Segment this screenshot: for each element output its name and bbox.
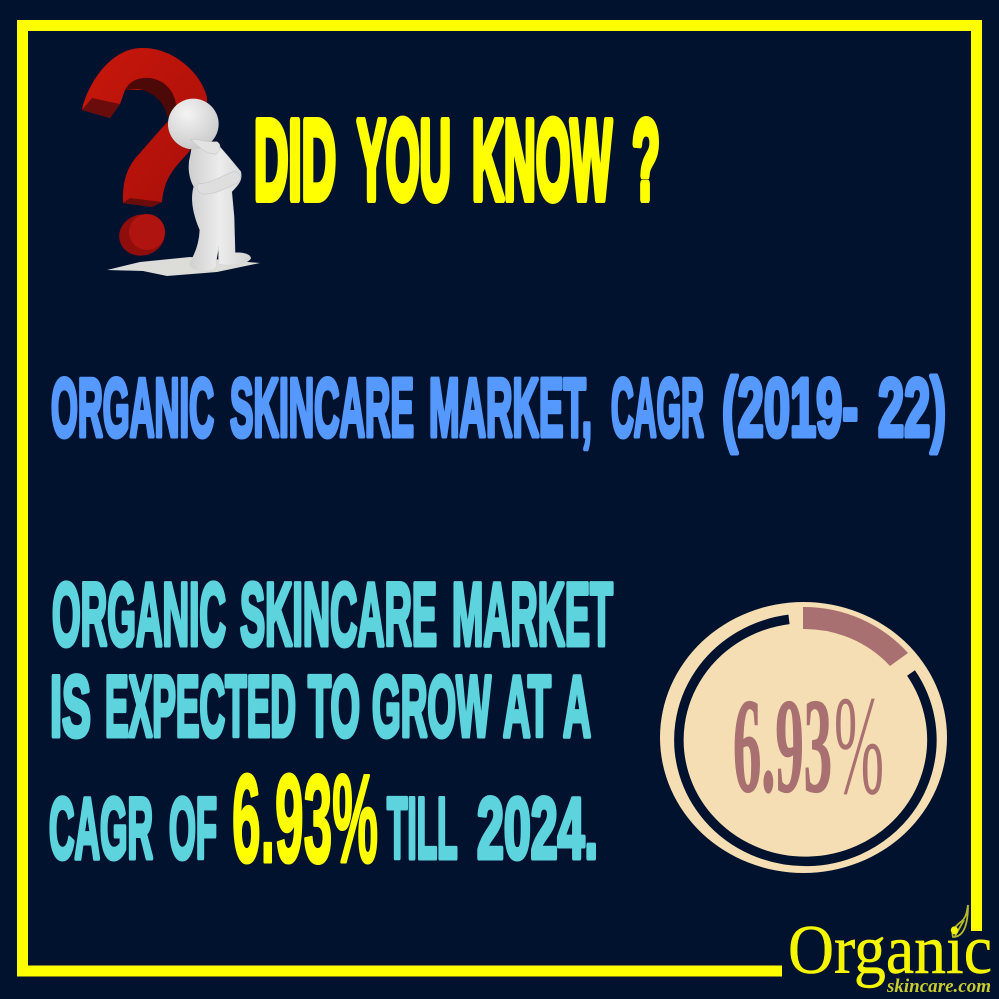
icon: floor shadow	[107, 257, 260, 276]
subheading: market CAGR: (2019-	[722, 361, 858, 454]
text block: growth statement: AT	[503, 659, 551, 755]
subheading: market CAGR: CAGR	[611, 361, 704, 454]
chart segment: 6.93%	[803, 607, 908, 666]
text block: growth statement: A	[563, 659, 591, 755]
infographic canvas: MARKET	[452, 564, 613, 664]
text block: growth statement: OF	[169, 781, 217, 877]
chart: CAGR donut: %	[834, 666, 884, 824]
subheading: market CAGR: MARKET,	[429, 361, 592, 454]
text block: growth statement: EXPECTED	[105, 659, 296, 755]
text block: growth statement: TILL	[387, 781, 457, 877]
text block: growth statement	[49, 564, 613, 889]
heading: did you know: KNOW	[472, 97, 612, 223]
logo: Organic skincare.com: skincare.com	[886, 976, 991, 997]
text block: growth statement: ORGANIC	[52, 564, 226, 664]
text block: growth statement: SKINCARE	[240, 564, 437, 664]
chart track	[679, 619, 932, 861]
chart: CAGR donut	[660, 602, 947, 873]
subheading: market CAGR: SKINCARE	[230, 361, 414, 454]
chart value: 6.93	[733, 672, 832, 821]
subheading: market CAGR: ORGANIC	[51, 361, 214, 454]
text block: growth statement: GROW	[372, 659, 491, 755]
text block: growth statement: CAGR	[49, 781, 153, 877]
heading: did you know: YOU	[357, 97, 451, 223]
subheading: market CAGR: 22)	[878, 361, 946, 454]
icon: red question mark	[82, 48, 207, 261]
icon: thinking white figure	[168, 99, 251, 271]
icon: question mark with thinking figure	[82, 48, 260, 276]
text block: growth statement: TO	[308, 659, 360, 755]
text block: growth statement: IS	[50, 659, 91, 755]
text block: growth statement: 2024.	[477, 781, 598, 877]
icon: leaf	[952, 905, 968, 937]
text block: growth statement: 6.93%	[232, 750, 378, 889]
heading: did you know: DID	[254, 97, 336, 223]
infographic canvas: ?	[632, 97, 660, 223]
